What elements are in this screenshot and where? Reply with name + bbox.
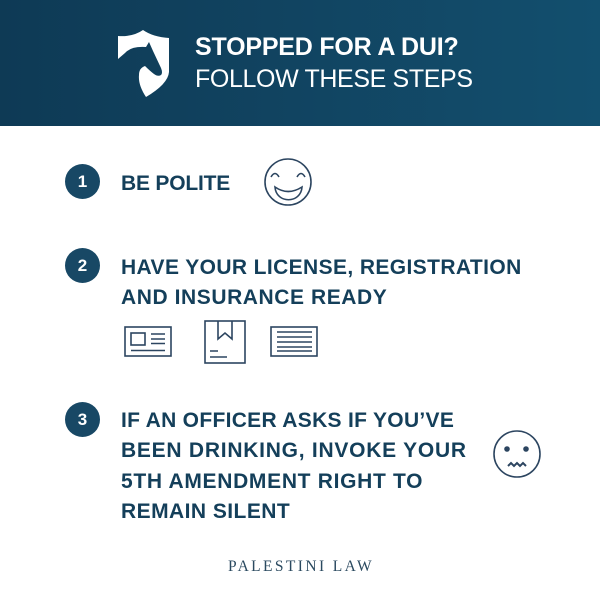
step 2 text: AND INSURANCE READY (121, 286, 387, 309)
step 3 text: BEEN DRINKING, INVOKE YOUR (121, 439, 467, 462)
footer brand name: PALESTINI LAW (228, 558, 374, 575)
step 1 text: BE POLITE (121, 172, 230, 195)
step 2 number (65, 248, 100, 283)
step 1 number: 1 (78, 172, 87, 191)
title: STOPPED FOR A DUI? (195, 33, 459, 61)
step 1 number (65, 164, 100, 199)
step 3 text: IF AN OFFICER ASKS IF YOU’VE (121, 409, 454, 432)
step 2 number: 2 (78, 256, 87, 275)
step 3 text: REMAIN SILENT (121, 500, 290, 523)
step 3 number: 3 (78, 410, 87, 429)
icon: horse shield logo (118, 30, 169, 97)
header banner (0, 0, 600, 126)
step 3 number (65, 402, 100, 437)
step 2 text: HAVE YOUR LICENSE, REGISTRATION (121, 256, 522, 279)
step 2 text (121, 256, 522, 309)
subtitle: FOLLOW THESE STEPS (195, 65, 473, 93)
step 3 text: 5TH AMENDMENT RIGHT TO (121, 470, 423, 493)
step 3 text (121, 409, 467, 523)
